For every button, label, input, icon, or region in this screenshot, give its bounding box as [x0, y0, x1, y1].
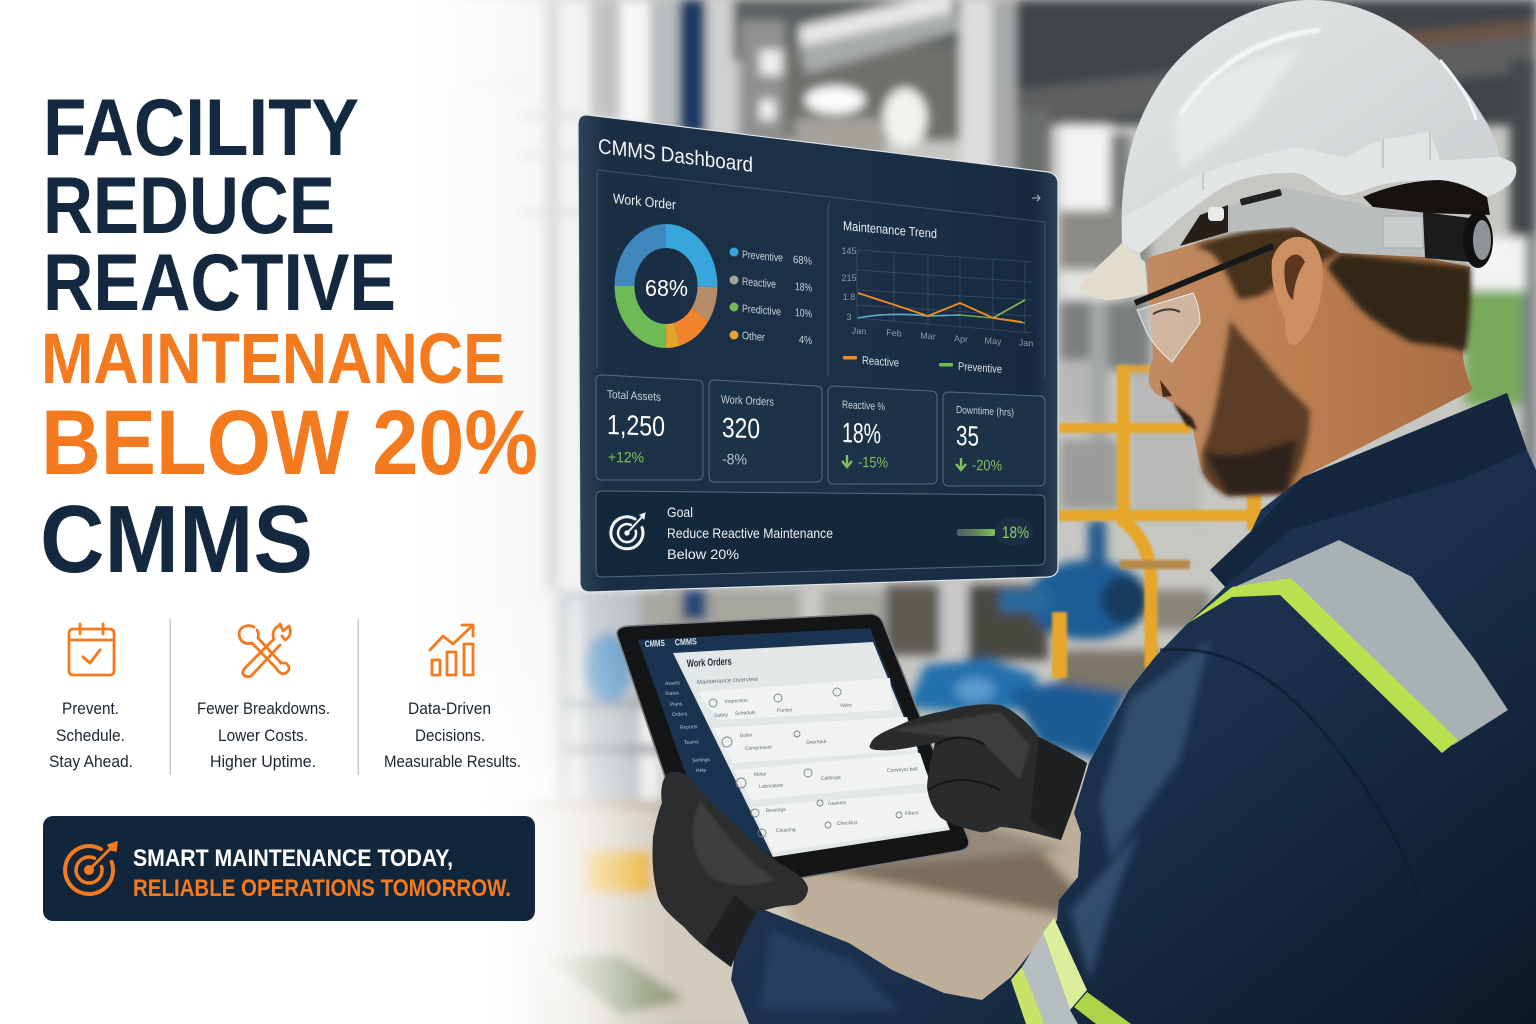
tablet subheading: Maintenance Overview [697, 677, 759, 686]
KPI card: downtime: Downtime (hrs) [956, 404, 1014, 419]
tablet work order rows: Gaskets [828, 800, 847, 807]
headline: Reactive: REACTIVE [43, 238, 396, 328]
goal value: 18% [1002, 523, 1029, 542]
KPI card: total assets [596, 375, 703, 480]
KPI card: work orders [709, 380, 822, 482]
worker: head and neck [1147, 230, 1473, 494]
worker: safety glasses [1135, 246, 1273, 362]
benefit column: data-driven [384, 625, 521, 771]
KPI card: downtime: 35 [956, 420, 979, 452]
worker: sleeve reflective stripe [1011, 918, 1131, 1024]
benefit text: fewer breakdowns: Fewer Breakdowns. [197, 699, 330, 718]
tablet work order rows: Boiler [740, 732, 753, 739]
tablet work order rows: Pumps [777, 707, 793, 714]
goal text: Reduce Reactive Maintenance [667, 525, 833, 541]
tablet work order rows: Compressor [745, 745, 773, 752]
tablet body [617, 614, 969, 885]
tablet work order rows: Schedule [735, 710, 756, 717]
trend axis labels: 1.8 [843, 292, 855, 302]
tablet sidebar items: Plans [670, 701, 683, 708]
tablet work order rows: Calibrate [821, 775, 841, 782]
trend axis labels: Jan [852, 326, 866, 337]
benefit text: prevent: Schedule. [56, 726, 125, 745]
line chart: maintenance trend [841, 246, 1033, 349]
goal text: Goal [667, 504, 693, 520]
pipes top [545, 0, 559, 590]
lower section [600, 590, 890, 710]
work order heading: Work Order [613, 190, 676, 213]
tablet work order rows: Checklist [837, 820, 858, 827]
KPI card: work orders: -8% [722, 451, 747, 468]
icon: target with arrow [65, 842, 117, 894]
benefit column: fewer breakdowns [197, 624, 330, 771]
worker: ear [1272, 237, 1323, 345]
callout banner [43, 816, 535, 921]
KPI card: total assets: Total Assets [607, 389, 661, 404]
donut legend: Other [742, 330, 765, 344]
tablet work order rows: Valve [840, 702, 852, 709]
trend axis labels: May [985, 335, 1002, 347]
donut legend: 68% [793, 254, 812, 268]
tablet title bar text: CMMS [675, 636, 697, 647]
goal text: Below 20% [667, 546, 739, 562]
trend axis labels [841, 246, 1033, 349]
trend axis labels: Apr [954, 334, 968, 344]
callout line 2: RELIABLE OPERATIONS TOMORROW. [133, 875, 511, 902]
headline: CMMS: CMMS [40, 486, 313, 593]
headline: Maintenance: MAINTENANCE [41, 320, 505, 399]
trend axis labels: Feb [886, 327, 902, 339]
trend legend: Preventive [958, 361, 1002, 376]
tablet sidebar items: Settings [692, 757, 711, 764]
KPI card: total assets: +12% [608, 449, 644, 467]
KPI card: reactive percent: Reactive % [842, 399, 885, 413]
tablet sidebar items: Help [696, 767, 707, 774]
trend legend: Reactive [862, 355, 899, 370]
worker: sleeve highlights [760, 640, 1210, 1010]
yellow handrails [1052, 365, 1269, 678]
trend axis labels: 3 [846, 312, 852, 322]
worker: hard hat [1078, 0, 1516, 300]
trend heading: Maintenance Trend [843, 218, 937, 241]
icon: calendar [69, 624, 114, 675]
headline [40, 83, 538, 593]
benefit text: prevent: Stay Ahead. [49, 752, 133, 771]
benefit text: data-driven: Data-Driven [408, 699, 491, 718]
donut legend: Predictive [742, 303, 781, 318]
benefit text: data-driven: Decisions. [415, 726, 485, 745]
benefit text: fewer breakdowns: Lower Costs. [218, 726, 308, 745]
trend axis labels: 215 [841, 273, 857, 283]
worker: hair [1195, 180, 1490, 352]
panel: CMMS dashboard [578, 115, 1058, 592]
KPI card: total assets: 1,250 [607, 409, 665, 442]
KPI card: downtime: -20% [972, 457, 1002, 475]
tablet [617, 614, 969, 885]
goal progress bar [957, 529, 995, 536]
headline: Facility: FACILITY [43, 83, 359, 173]
icon: bar chart with arrow [430, 625, 473, 675]
donut legend: 18% [795, 281, 812, 294]
goal value [995, 517, 1033, 545]
tablet sidebar items: Assets [665, 680, 681, 687]
left glove [653, 772, 808, 967]
benefit text: prevent [49, 699, 133, 771]
tablet work order rows: Motor [754, 771, 767, 778]
worker: beard [1160, 320, 1310, 496]
KPI card: reactive percent: -15% [858, 454, 888, 472]
tablet sidebar items: Orders [672, 711, 688, 718]
tablet heading: Work Orders [687, 656, 732, 670]
donut legend: Reactive [742, 276, 776, 291]
KPI card: work orders: 320 [722, 412, 760, 444]
tablet sidebar items: Reports [680, 724, 698, 731]
trend axis labels: Mar [920, 330, 936, 342]
tablet title bar text: CMMS [645, 638, 665, 649]
tablet work order rows: Filters [905, 810, 919, 817]
tablet work order rows [698, 678, 948, 852]
benefit text: data-driven: Measurable Results. [384, 752, 521, 771]
KPI card: work orders: Work Orders [721, 394, 774, 409]
tablet sidebar items: Status [665, 690, 680, 697]
goal panel [596, 491, 1045, 577]
work order panel outline [597, 170, 1045, 378]
donut centre value: 68% [645, 275, 688, 301]
tablet sidebar items [665, 680, 711, 774]
donut chart [608, 216, 724, 356]
tablet work order rows: Bearings [766, 807, 786, 814]
KPI card: downtime [943, 392, 1045, 486]
headline: Reduce: REDUCE [43, 161, 335, 251]
donut legend: 4% [799, 334, 812, 347]
donut legend: 10% [795, 307, 812, 320]
benefit text: prevent: Prevent. [62, 699, 119, 718]
tablet title bar text [645, 636, 697, 649]
tablet screen content [673, 642, 950, 857]
icon: goal target [611, 513, 645, 549]
tablet work order rows: Conveyor belt [887, 766, 919, 774]
trend axis labels: 145 [841, 246, 857, 256]
dashboard title: CMMS Dashboard [598, 135, 753, 177]
worker: shoulder reflective stripe [1188, 540, 1508, 753]
worker: jacket body [731, 393, 1536, 1024]
benefit column: prevent [49, 624, 133, 771]
tablet work order rows: Lubrication [759, 783, 784, 790]
tablet sidebar items: Teams [684, 739, 699, 746]
goal text [667, 504, 833, 562]
donut legend: Preventive [742, 249, 783, 265]
icon: crossed wrenches [239, 624, 290, 677]
icon: arrow [1032, 195, 1040, 201]
headline: Below 20%: BELOW 20% [41, 392, 538, 494]
tablet work order rows: Inspection [725, 698, 748, 705]
background: blurred industrial plant [483, 0, 1536, 1024]
KPI card: reactive percent: 18% [842, 417, 881, 449]
worker: headband [1180, 187, 1493, 268]
trend axis labels: Jan [1019, 338, 1033, 349]
benefit text: data-driven [384, 699, 521, 771]
benefit text: fewer breakdowns [197, 699, 330, 771]
callout line 1: SMART MAINTENANCE TODAY, [133, 845, 453, 872]
worker [731, 0, 1536, 1024]
tablet screen frame [638, 628, 950, 857]
right glove [869, 704, 1087, 840]
tablet work order rows: Overhaul [806, 739, 826, 746]
tablet work order rows: Cleaning [776, 827, 796, 834]
KPI card: reactive percent [828, 386, 937, 484]
benefit text: fewer breakdowns: Higher Uptime. [210, 752, 316, 771]
tablet work order rows: Safety [714, 712, 729, 719]
trend legend [843, 355, 1002, 376]
worker: collar [1210, 393, 1527, 587]
donut legend [730, 248, 812, 347]
